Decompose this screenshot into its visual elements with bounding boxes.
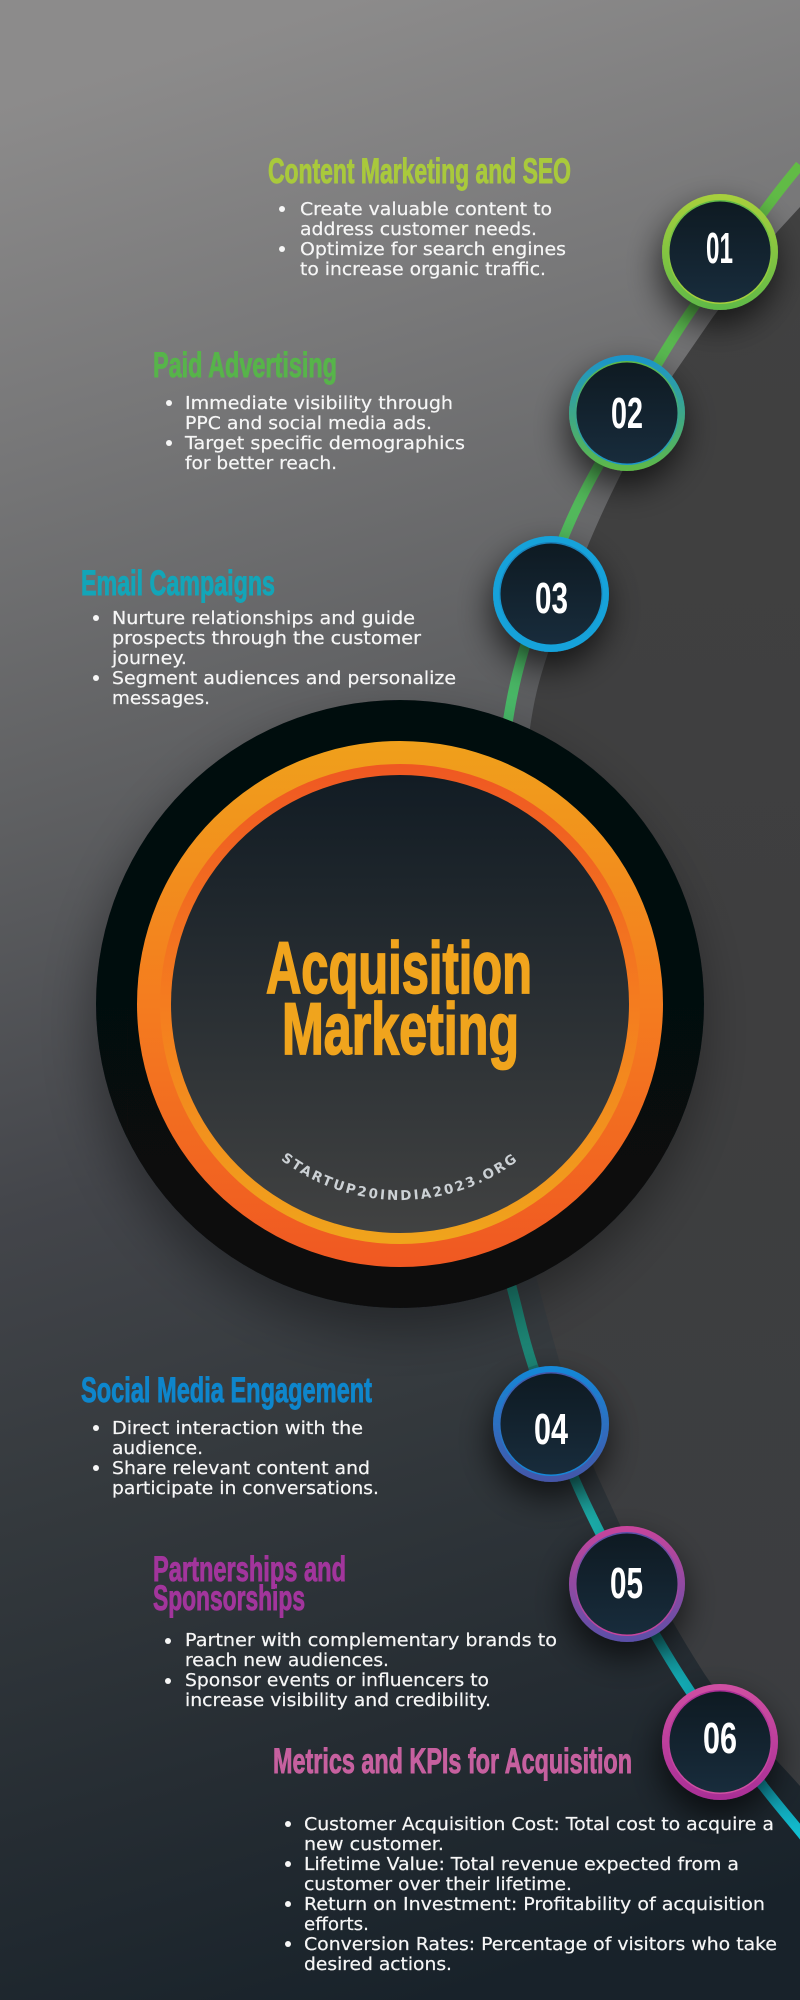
bullet list: new customer. (304, 1835, 444, 1855)
heading: Content Marketing and SEO (268, 152, 571, 191)
heading: Partnerships and (153, 1550, 346, 1589)
step 01 badge (662, 194, 778, 310)
right side panel behind timeline (510, 207, 800, 1786)
bullet list: reach new audiences. (185, 1651, 389, 1671)
section 02: paid advertising (153, 346, 465, 474)
bullet list: Lifetime Value: Total revenue expected from a (304, 1855, 739, 1875)
bullet list: Return on Investment: Profitability of acquisition (304, 1895, 765, 1915)
bullet list: Immediate visibility through (185, 394, 453, 414)
step 03 badge (493, 536, 609, 652)
bullet list: journey. (111, 649, 187, 669)
step 05 badge (569, 1526, 685, 1642)
bullet list (279, 200, 566, 280)
bullet list: Target specific demographics (184, 434, 465, 454)
bullet list: desired actions. (304, 1955, 452, 1975)
heading: Social Media Engagement (81, 1371, 372, 1410)
step 01 badge: 01 (706, 224, 733, 273)
bullet list: messages. (112, 689, 210, 709)
section 01: content marketing (268, 152, 571, 280)
bullet list: address customer needs. (300, 220, 537, 240)
bullet list: Segment audiences and personalize (112, 669, 456, 689)
outer orange ring (137, 741, 663, 1267)
bullet list: Sponsor events or influencers to (185, 1671, 489, 1691)
main title: Marketing (282, 989, 519, 1070)
timeline line: lower (505, 1260, 800, 1839)
step 05 badge: 05 (610, 1559, 643, 1608)
inner dark core (171, 775, 629, 1233)
bullet list: Nurture relationships and guide (112, 609, 415, 629)
main title: Acquisition (266, 928, 532, 1009)
bullet list (93, 1419, 379, 1499)
bullet list: Direct interaction with the (112, 1419, 363, 1439)
bullet list (93, 609, 456, 709)
heading: Metrics and KPIs for Acquisition (273, 1742, 632, 1781)
section 04: social media (81, 1371, 379, 1499)
step 04 badge (493, 1366, 609, 1482)
step 06 badge: 06 (703, 1714, 737, 1763)
central disc (77, 700, 709, 1339)
step 06 badge (662, 1684, 778, 1800)
bullet list: Optimize for search engines (300, 240, 566, 260)
curved website text: STARTUP20INDIA2023.ORG (282, 1153, 516, 1200)
section 05: partnerships (153, 1550, 557, 1711)
heading: Paid Advertising (153, 346, 337, 385)
bullet list: Create valuable content to (300, 200, 552, 220)
section 03: email campaigns (81, 564, 456, 709)
bullet list (285, 1815, 777, 1975)
bullet list: Partner with complementary brands to (185, 1631, 557, 1651)
bullet list: to increase organic traffic. (300, 260, 546, 280)
step 03 badge: 03 (535, 574, 568, 623)
heading: Sponsorships (153, 1579, 305, 1618)
bullet list: increase visibility and credibility. (185, 1691, 491, 1711)
bullet list: prospects through the customer (112, 629, 422, 649)
main title (266, 928, 532, 1070)
section 06: metrics and KPIs (273, 1742, 777, 1975)
bullet list: participate in conversations. (112, 1479, 379, 1499)
bullet list: for better reach. (185, 454, 337, 474)
bullet list: Share relevant content and (112, 1459, 370, 1479)
bullet list: audience. (112, 1439, 203, 1459)
bullet list (166, 394, 465, 474)
bullet list: efforts. (304, 1915, 369, 1935)
inner orange ring (160, 764, 640, 1244)
step 02 badge: 02 (611, 389, 643, 438)
bullet list: PPC and social media ads. (185, 414, 432, 434)
bullet list: Conversion Rates: Percentage of visitors who take (304, 1935, 777, 1955)
step 04 badge: 04 (534, 1405, 568, 1454)
step 02 badge (569, 355, 685, 471)
bullet list: customer over their lifetime. (304, 1875, 572, 1895)
timeline line: upper (505, 165, 800, 740)
heading (153, 1550, 346, 1618)
bullet list: Customer Acquisition Cost: Total cost to acquire a (304, 1815, 774, 1835)
heading: Email Campaigns (81, 564, 275, 603)
bullet list (165, 1631, 557, 1711)
